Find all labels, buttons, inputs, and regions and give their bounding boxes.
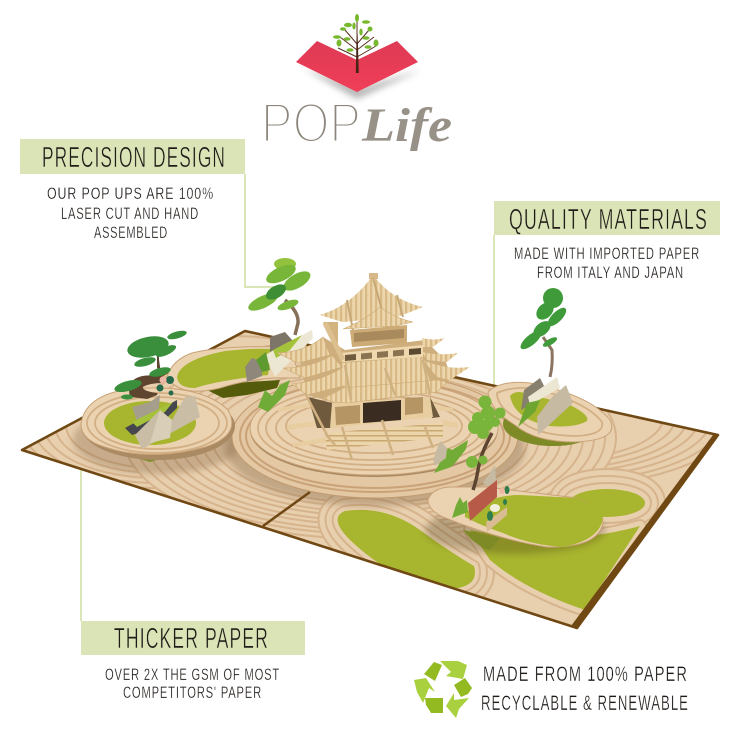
upper front roof [343,307,413,329]
plate: bottom right [428,396,603,550]
panel: precision design [20,139,245,242]
pop-up card illustration [22,258,735,628]
plate shadows [224,436,528,509]
rocks [125,395,200,449]
icon: right tree [518,288,569,377]
plate: centre upper [250,381,498,477]
heading: THICKER PAPER [114,623,269,655]
grass: small right patch [569,489,645,517]
heading box [494,201,720,235]
text block [47,184,214,242]
rail [325,323,423,362]
red panel [468,480,497,521]
eaves: right [422,338,470,380]
ring bands around grass [338,489,645,610]
arrow: top [424,661,467,681]
icon: open book shadow [303,68,421,99]
text block: COMPETITORS' PAPER [123,683,262,702]
logo: Pop Life [261,14,452,154]
wordmark POP: POP [261,91,361,154]
top roof [320,275,423,322]
eaves: left [277,337,347,395]
connector: precision design [245,174,285,287]
icon: front tree [466,396,506,490]
door [363,400,401,423]
text block: LASER CUT AND HAND [61,204,199,223]
rocks and paper [518,377,573,435]
rocks and grass behind pagoda [245,330,313,412]
front roof [323,380,447,403]
heading box [81,621,305,655]
text block: ASSEMBLED [94,223,168,242]
paper card with flowers [486,486,510,532]
fold line [263,492,310,526]
arrow: right [446,678,472,718]
text block [514,244,700,282]
rock [433,441,447,466]
connector: quality materials [493,235,495,388]
board edge [22,331,718,628]
arrow: left [414,678,443,713]
backing [300,337,452,405]
wordmark Life: Life [361,99,452,152]
icon: logo tree [333,14,378,73]
icon: red open book [296,41,418,92]
icon: left tree [113,329,188,400]
upper roof platform and wall [323,322,407,347]
shrubs [434,440,468,518]
text block: made from 100% paper [481,663,689,715]
base beams [278,402,458,450]
text block [105,665,280,702]
plate: centre lower [232,374,518,498]
heading box [20,139,245,174]
board [22,326,735,628]
panel: quality materials [494,201,720,282]
text block: OVER 2X THE GSM OF MOST [105,665,280,684]
grass: lower left blob [338,510,475,589]
panel: thicker paper [81,621,305,702]
plate: left [81,329,235,462]
middle roof [342,357,430,388]
icon: back left tree [246,258,313,335]
text block: OUR POP UPS ARE 100% [47,184,214,203]
pagoda [277,273,470,460]
grass: lower right strip [470,526,640,610]
plate: right [488,288,612,446]
connector: thicker paper [80,470,82,621]
plate: back left [167,347,300,398]
walls [308,397,440,428]
heading: PRECISION DESIGN [42,142,226,174]
icon: recycling arrows [414,661,472,718]
diagonal supports [305,360,433,460]
